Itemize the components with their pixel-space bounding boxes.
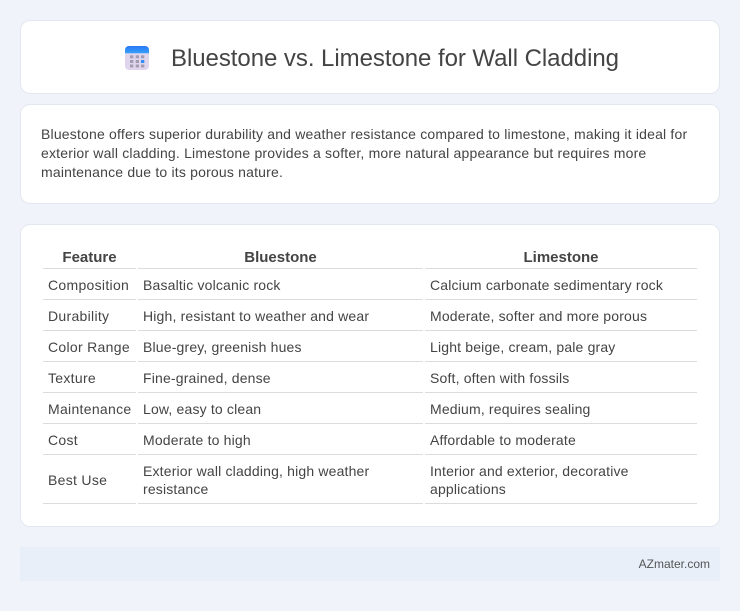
row: best use: Best Use (48, 472, 107, 488)
row: durability (43, 308, 697, 331)
row: color range: Blue-grey, greenish hues (143, 339, 302, 355)
comparison table (43, 249, 697, 504)
table header (43, 249, 697, 269)
row: composition: Composition (48, 277, 129, 293)
row: composition: Calcium carbonate sedimentary rock (430, 277, 663, 293)
icon: calendar (125, 46, 149, 70)
panel: summary (20, 104, 720, 204)
title: Bluestone vs. Limestone for Wall Cladding (171, 45, 619, 72)
row: cost: Affordable to moderate (430, 432, 576, 448)
row: composition: Basaltic volcanic rock (143, 277, 281, 293)
table header: Feature (62, 249, 117, 266)
table header: Bluestone (244, 249, 317, 266)
row: durability: High, resistant to weather and wear (143, 308, 369, 324)
row: cost: Moderate to high (143, 432, 251, 448)
row: maintenance: Medium, requires sealing (430, 401, 590, 417)
row: color range (43, 339, 697, 362)
footer bar (20, 547, 720, 581)
row: best use: applications (430, 481, 506, 497)
row: texture: Fine-grained, dense (143, 370, 271, 386)
summary text: exterior wall cladding. Limestone provides a softer, more natural appearance but requires more (41, 145, 646, 161)
footer credit: AZmater.com (639, 557, 710, 571)
row: texture: Soft, often with fossils (430, 370, 569, 386)
row: texture (43, 370, 697, 393)
row: color range: Light beige, cream, pale gray (430, 339, 615, 355)
panel: title card (20, 20, 720, 94)
row: best use: Interior and exterior, decorative (430, 463, 629, 479)
row: maintenance: Low, easy to clean (143, 401, 261, 417)
summary text: maintenance due to its porous nature. (41, 164, 283, 180)
row: best use (43, 463, 697, 504)
row: texture: Texture (48, 370, 96, 386)
table header: Limestone (523, 249, 598, 266)
row: best use: resistance (143, 481, 209, 497)
row: cost: Cost (48, 432, 78, 448)
summary text: Bluestone offers superior durability and weather resistance compared to limestone, making it ideal for (41, 126, 687, 142)
panel: comparison table (20, 224, 720, 527)
row: best use: Exterior wall cladding, high weather (143, 463, 369, 479)
row: cost (43, 432, 697, 455)
summary text (41, 126, 687, 180)
row: maintenance: Maintenance (48, 401, 131, 417)
row: durability: Moderate, softer and more porous (430, 308, 647, 324)
row: durability: Durability (48, 308, 109, 324)
row: composition (43, 277, 697, 300)
row: color range: Color Range (48, 339, 130, 355)
row: maintenance (43, 401, 697, 424)
